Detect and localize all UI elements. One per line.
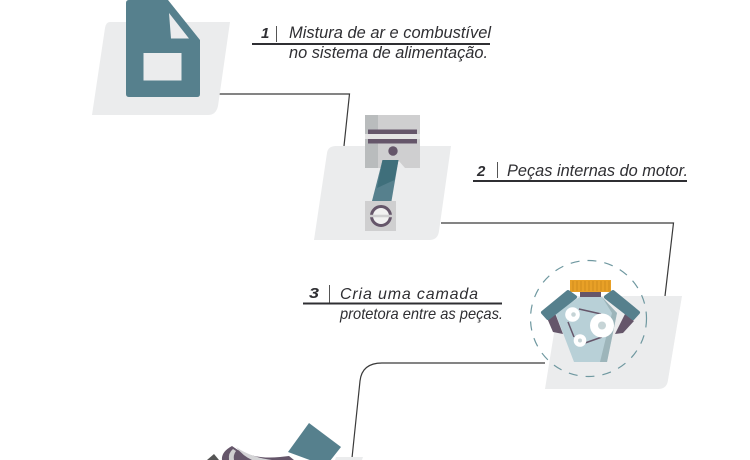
step 3 label — [303, 285, 503, 323]
step 1 label: Mistura de ar e combustível — [289, 24, 492, 42]
step 1 label — [252, 24, 492, 62]
step 2 label: Peças internas do motor. — [507, 162, 688, 180]
connector: step 3 to step 4 — [352, 363, 545, 458]
icon: piston — [365, 115, 420, 231]
connector: step 1 to step 2 — [219, 94, 350, 146]
icon: engine — [530, 260, 646, 376]
step 3 label: protetora entre as peças. — [339, 306, 503, 323]
icon: document — [126, 0, 200, 97]
connector: step 2 to step 3 — [441, 223, 674, 296]
step 1 label: no sistema de alimentação. — [289, 44, 488, 62]
step 1 label: 1 — [261, 25, 269, 42]
step 2 label: 2 — [476, 163, 486, 180]
icon: step 4 part — [207, 423, 341, 460]
step 3 label: Cria uma camada — [340, 286, 478, 303]
panel: step 1 background — [92, 22, 230, 115]
panel: step 4 background — [335, 457, 363, 460]
panel: step 3 background — [545, 296, 682, 389]
step 3 label: 3 — [309, 285, 320, 302]
panel: step 2 background — [314, 146, 451, 240]
